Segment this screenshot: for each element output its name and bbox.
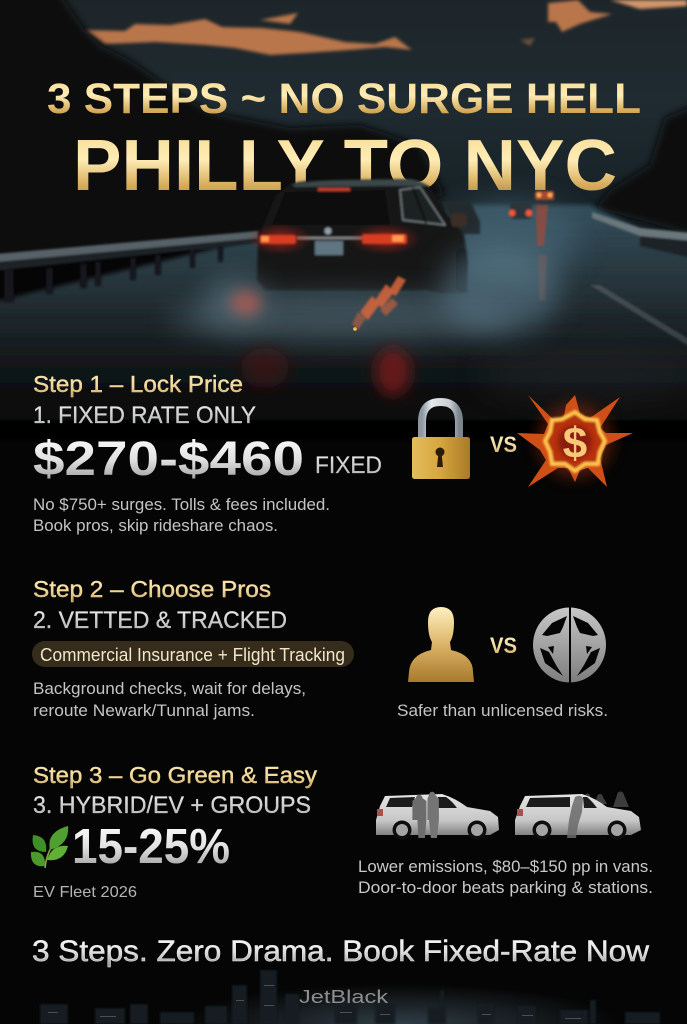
fixed label: FIXED [315,452,382,479]
rear window [272,190,390,225]
step 2 heading: Step 2 – Choose Pros [33,576,271,602]
side windows [400,187,445,225]
wheel caption: Safer than unlicensed risks. [397,701,608,720]
right guard rail [592,212,687,258]
SUV body [257,179,468,293]
icon: gold padlock [412,402,470,479]
title [47,75,641,206]
side mirror [451,213,467,227]
background group [583,792,629,807]
tailgate strip [297,237,363,239]
step 3 description: Door-to-door beats parking & stations. [358,878,653,897]
wheel right [456,248,467,292]
roofline highlight [292,179,428,187]
dark treeline right [595,100,687,238]
passengers [412,795,426,838]
license plate [315,241,343,255]
illustration: van with group [515,792,641,840]
window lights [48,985,581,1019]
badge [324,228,332,234]
step 2 panel [32,576,608,720]
distant traffic [441,191,554,300]
fleet caption: EV Fleet 2026 [33,884,137,901]
road lane marks [590,285,687,348]
step 1 description [33,495,330,535]
brand name: JetBlack [299,987,389,1007]
wet road reflection [241,348,411,396]
step 2 subheading: 2. VETTED & TRACKED [33,607,287,634]
distant mist [440,200,580,280]
step 1 description: No $750+ surges. Tolls & fees included. [33,495,330,514]
brake light bar [318,188,350,191]
dark treeline left [0,0,445,260]
orange sunset clouds [85,0,687,55]
icon: gold person [408,607,474,682]
vs label: VS [490,633,517,658]
dollar sign: $ [563,419,587,468]
left guard rail [0,231,258,302]
percentage stat: 15-25% [72,820,230,874]
spray mist [170,245,560,342]
SUV and traffic [170,179,687,403]
step 1 heading: Step 1 – Lock Price [33,371,243,397]
step 2 description [33,679,306,720]
step 1 description: Book pros, skip rideshare chaos. [33,516,278,535]
icon: exploding dollar surge [517,395,633,487]
title line 2: PHILLY TO NYC [73,126,617,206]
step 3 description [358,857,653,897]
icon: green leaves [31,826,68,868]
footer skyline [40,970,660,1024]
step 3 subheading: 3. HYBRID/EV + GROUPS [33,792,311,819]
step 3 description: Lower emissions, $80–$150 pp in vans. [358,857,653,876]
callout pill: Commercial Insurance + Flight Tracking [40,645,345,665]
step 3 panel [31,762,653,901]
vs label: VS [490,432,517,457]
icon: steering wheel [533,607,606,683]
title line 1: 3 STEPS ~ NO SURGE HELL [47,75,641,123]
grey haze on right [480,347,687,403]
illustration: SUV with two passengers [376,792,499,840]
step 1 panel [33,371,633,535]
step 2 description: reroute Newark/Tunnal jams. [33,701,255,720]
step 2 description: Background checks, wait for delays, [33,679,306,698]
step 3 heading: Step 3 – Go Green & Easy [33,762,318,788]
hero photo: rainy highway scene [0,0,687,440]
orange spray streaks [352,276,406,330]
tail lights [248,223,421,255]
step 1 subheading: 1. FIXED RATE ONLY [33,402,256,429]
road surface [0,205,687,440]
call to action: 3 Steps. Zero Drama. Book Fixed-Rate Now [32,935,649,968]
price range: $270-$460 [33,433,304,486]
